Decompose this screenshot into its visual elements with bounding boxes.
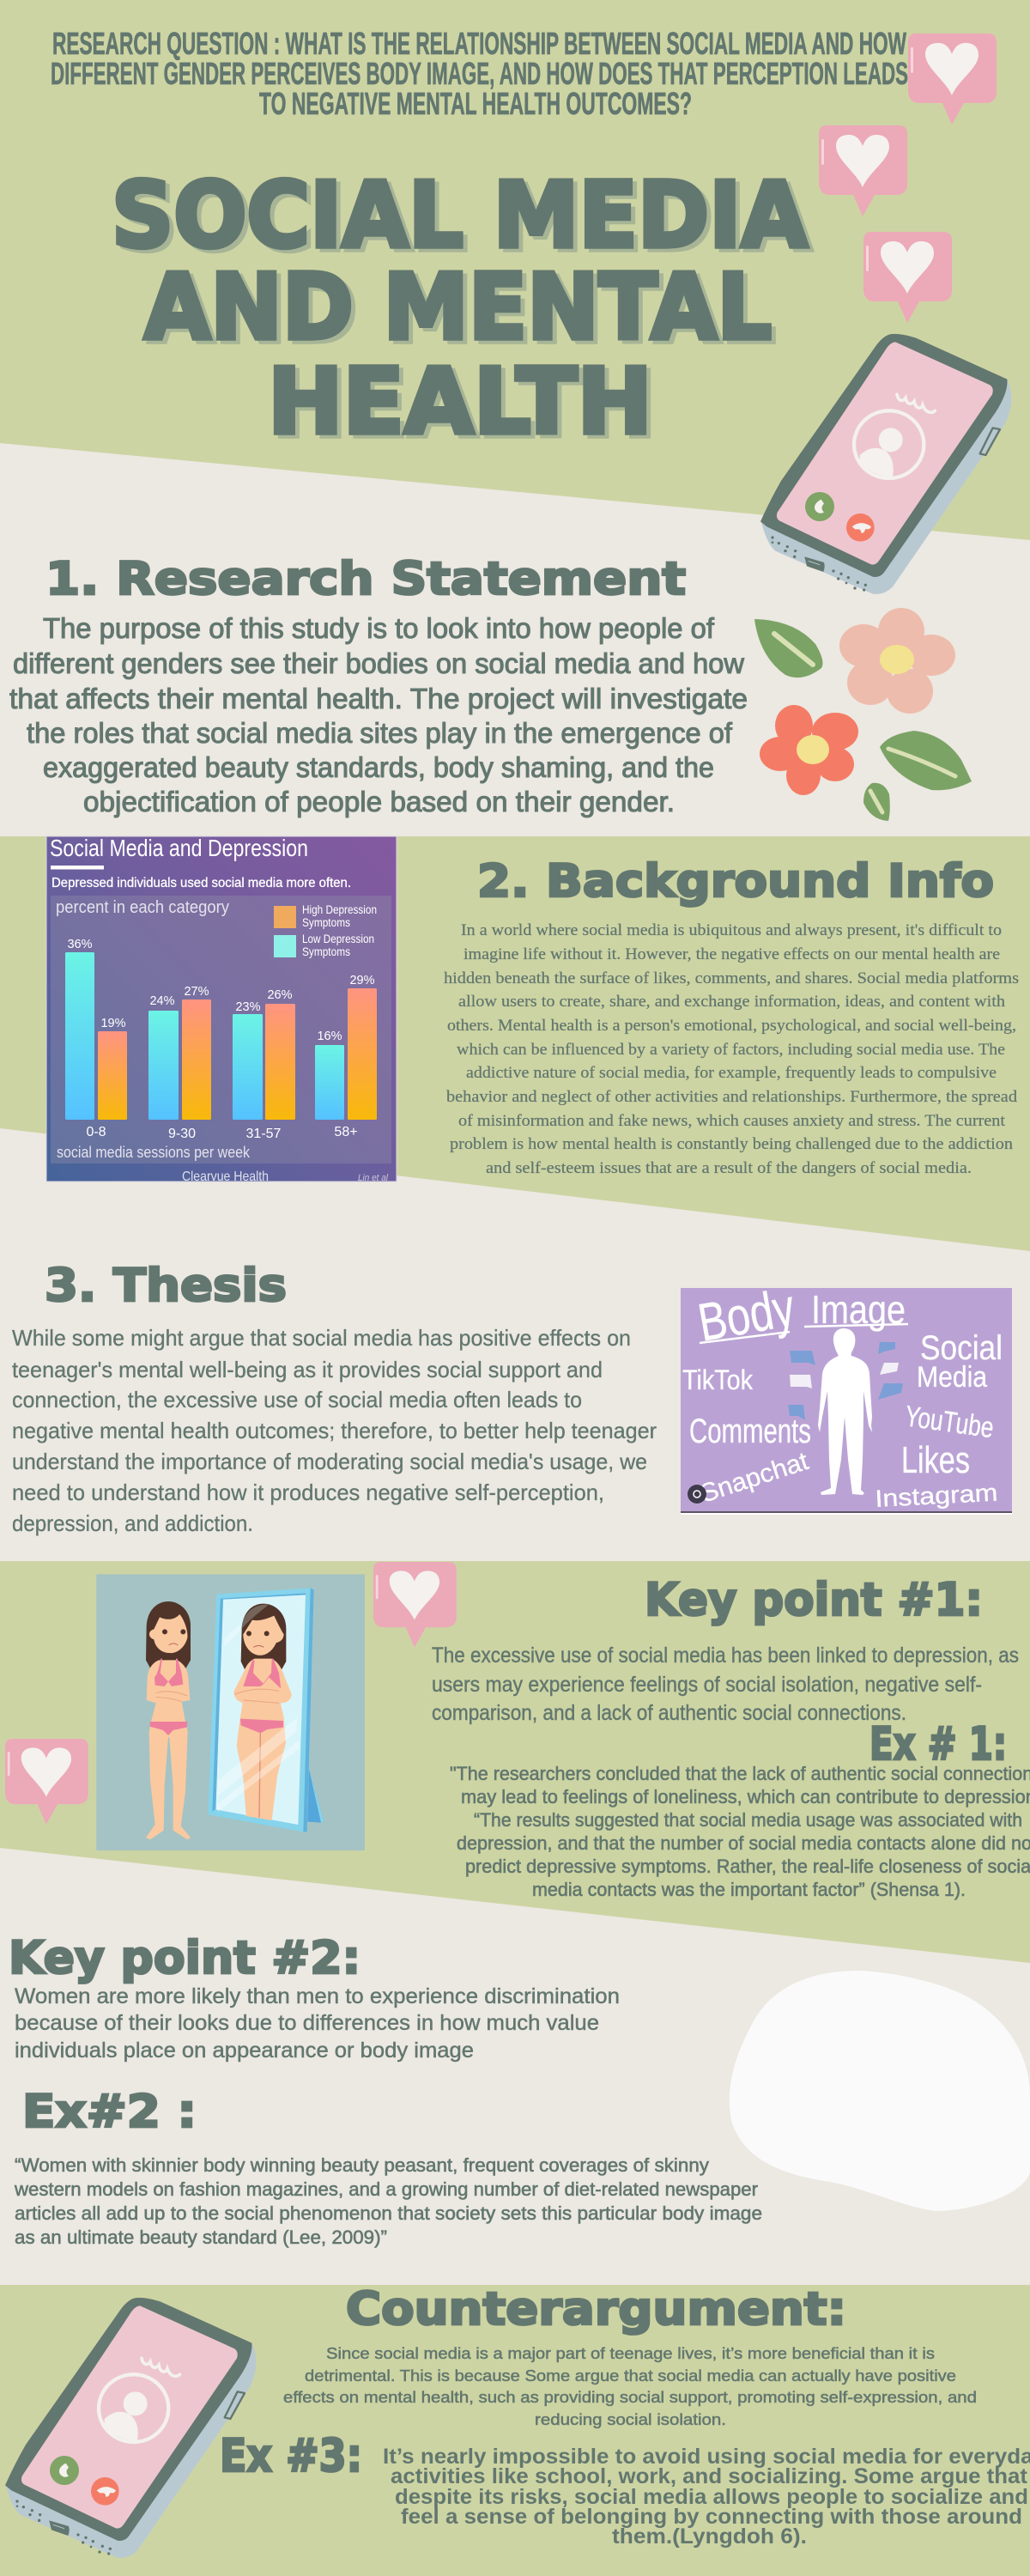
example 3 paragraph: despite its risks, social media allows people to socialize and bbox=[395, 2485, 1028, 2509]
bar values: 19% bbox=[100, 1017, 126, 1030]
labels: social platforms: Likes bbox=[901, 1439, 970, 1481]
bar values: 36% bbox=[67, 938, 93, 951]
key point 1 paragraph: comparison, and a lack of authentic social connections. bbox=[432, 1701, 906, 1725]
category labels bbox=[86, 1125, 358, 1141]
icon: large leaf bbox=[880, 731, 972, 790]
thesis paragraph: understand the importance of moderating social media's usage, we bbox=[12, 1449, 647, 1474]
heading: counterargument: Counterargument: bbox=[346, 2283, 846, 2336]
source: Clearvue Health bbox=[182, 1170, 269, 1184]
heading: key point 1: Key point #1: bbox=[645, 1574, 983, 1626]
title: HEALTH bbox=[268, 349, 652, 454]
icon: lens button bbox=[688, 1485, 706, 1504]
labels: social platforms: TikTok bbox=[682, 1364, 754, 1395]
example 1 quote: may lead to feelings of loneliness, which can contribute to depression. bbox=[461, 1786, 1030, 1807]
background info paragraph: of misinformation and fake news, which causes anxiety and stress. The current bbox=[458, 1112, 1006, 1130]
research statement paragraph: the roles that social media sites play in the emergence of bbox=[27, 717, 733, 749]
background info paragraph: In a world where social media is ubiquitous and always present, it's difficult to bbox=[461, 921, 1002, 939]
icon: phone bottom bbox=[5, 2298, 256, 2558]
key point 2 paragraph: individuals place on appearance or body image bbox=[15, 2038, 474, 2063]
key point 1 paragraph: users may experience feelings of social isolation, negative self- bbox=[432, 1673, 982, 1697]
icon: phone top bbox=[760, 334, 1011, 594]
background info paragraph: imagine life without it. However, the negative effects on our mental health are bbox=[464, 945, 1000, 963]
icon: small leaf bbox=[863, 783, 890, 821]
labels: social platforms: Instagram bbox=[875, 1479, 998, 1512]
bar values: 27% bbox=[184, 985, 209, 999]
icon: coral flower bbox=[760, 705, 858, 795]
labels: social platforms bbox=[682, 1329, 1003, 1512]
bar values: 16% bbox=[317, 1030, 342, 1043]
heading: key point 2: Key point #2: bbox=[9, 1932, 360, 1984]
example 1 quote bbox=[450, 1763, 1030, 1900]
legend bbox=[274, 903, 377, 958]
panel: mirror illustration bbox=[96, 1574, 365, 1850]
title bbox=[112, 163, 808, 454]
axis label: percent in each category bbox=[56, 898, 229, 917]
example 3 paragraph: feel a sense of belonging by connecting with those around bbox=[401, 2505, 1022, 2529]
counterargument paragraph: Since social media is a major part of teenage lives, it’s more beneficial than it is bbox=[326, 2345, 935, 2362]
labels: social platforms: Comments bbox=[689, 1413, 811, 1450]
icon: heart bubble 3 bbox=[863, 232, 952, 323]
example 3 paragraph: activities like school, work, and socializing. Some argue that bbox=[391, 2464, 1028, 2488]
example 2 quote: “Women with skinnier body winning beauty peasant, frequent coverages of skinny bbox=[15, 2154, 709, 2176]
mirror bbox=[208, 1588, 324, 1832]
heading: body image handwriting: Body bbox=[694, 1278, 799, 1353]
icon: top leaf bbox=[754, 619, 822, 677]
category labels: 0-8 bbox=[86, 1125, 106, 1139]
bar values: 29% bbox=[349, 974, 375, 987]
icon: heart bubble 1 bbox=[908, 33, 997, 125]
source: Lin et al bbox=[358, 1173, 389, 1183]
thesis paragraph bbox=[12, 1325, 657, 1536]
heading: body image handwriting: Image bbox=[811, 1287, 906, 1332]
bar values bbox=[67, 938, 375, 1043]
research statement paragraph: The purpose of this study is to look into how people of bbox=[43, 612, 715, 644]
legend: Symptoms bbox=[302, 916, 350, 929]
key point 2 paragraph: Women are more likely than men to experience discrimination bbox=[15, 1984, 620, 2008]
icons: comment bubbles bbox=[788, 1342, 903, 1420]
thesis paragraph: need to understand how it produces negative self-perception, bbox=[12, 1479, 604, 1505]
counterargument paragraph: detrimental. This is because Some argue that social media can actually have positive bbox=[305, 2367, 956, 2385]
source bbox=[182, 1170, 389, 1184]
heading: body image handwriting bbox=[694, 1278, 908, 1353]
legend: High Depression bbox=[302, 903, 377, 916]
labels: social platforms: YouTube bbox=[903, 1400, 996, 1444]
counterargument paragraph bbox=[283, 2345, 977, 2428]
icon: heart bubble left bbox=[5, 1739, 88, 1825]
example 1 quote: “The results suggested that social media usage was associated with bbox=[474, 1809, 1022, 1831]
background info paragraph bbox=[444, 921, 1019, 1177]
icon: pink flower bbox=[839, 608, 955, 714]
background info paragraph: behavior and neglect of other activities and relationships. Furthermore, the spread bbox=[446, 1088, 1018, 1106]
title: SOCIAL MEDIA bbox=[112, 163, 808, 268]
background info paragraph: and self-esteem issues that are a result of the dangers of social media. bbox=[486, 1159, 972, 1177]
category labels: 58+ bbox=[334, 1125, 358, 1139]
key point 1 paragraph bbox=[432, 1643, 1019, 1725]
counterargument paragraph: effects on mental health, such as providing social support, promoting self-expression, and bbox=[283, 2389, 977, 2406]
key point 2 paragraph: because of their looks due to differences in how much value bbox=[15, 2011, 599, 2035]
background info paragraph: problem is how mental health is constantly being challenged due to the addiction bbox=[450, 1135, 1014, 1153]
category labels: 9-30 bbox=[168, 1127, 196, 1141]
chart subtitle: Depressed individuals used social media more often. bbox=[52, 876, 351, 890]
thesis paragraph: While some might argue that social media has positive effects on bbox=[12, 1325, 631, 1351]
research question bbox=[51, 26, 908, 121]
bar values: 23% bbox=[235, 1000, 261, 1014]
thesis paragraph: depression, and addiction. bbox=[12, 1510, 253, 1536]
example 3 paragraph: them.(Lyngdoh 6). bbox=[612, 2524, 807, 2549]
heading: thesis: 3. Thesis bbox=[45, 1260, 287, 1312]
reflection bbox=[217, 1604, 300, 1820]
background info paragraph: addictive nature of social media, for example, frequently leads to compulsive bbox=[466, 1064, 997, 1082]
research statement paragraph: objectification of people based on their gender. bbox=[83, 786, 675, 817]
heading: background info: 2. Background Info bbox=[477, 855, 994, 908]
legend: Symptoms bbox=[302, 945, 350, 958]
example 2 quote: western models on fashion magazines, and a growing number of diet-related newspaper bbox=[14, 2178, 758, 2200]
x axis title: social media sessions per week bbox=[57, 1144, 251, 1161]
research question: TO NEGATIVE MENTAL HEALTH OUTCOMES? bbox=[259, 86, 692, 121]
heading: research statement: 1. Research Statement bbox=[45, 553, 686, 605]
background info paragraph: others. Mental health is a person's emotional, psychological, and social well-being, bbox=[447, 1017, 1016, 1035]
title: AND MENTAL bbox=[144, 255, 772, 360]
example 1 quote: predict depressive symptoms. Rather, the real-life closeness of social bbox=[465, 1856, 1030, 1877]
girl standing bbox=[146, 1601, 191, 1839]
labels: social platforms: Social bbox=[920, 1329, 1003, 1367]
bar values: 24% bbox=[149, 994, 175, 1008]
white blob bbox=[730, 1971, 1030, 2211]
background info paragraph: allow users to create, share, and exchange information, ideas, and content with bbox=[458, 993, 1006, 1011]
example 3 paragraph bbox=[383, 2445, 1030, 2549]
thesis paragraph: teenager's mental well-being as it provides social support and bbox=[12, 1357, 603, 1382]
bar values: 26% bbox=[267, 988, 293, 1002]
example 2 quote bbox=[14, 2154, 762, 2248]
icon: heart bubble 2 bbox=[819, 125, 907, 216]
icon: body silhouette bbox=[818, 1328, 872, 1495]
example 3 paragraph: It’s nearly impossible to avoid using social media for everyday bbox=[383, 2445, 1030, 2469]
labels: social platforms: Media bbox=[917, 1361, 987, 1394]
icon: heart bubble by mirror bbox=[373, 1562, 457, 1648]
heading: example 2: Ex#2 : bbox=[22, 2086, 197, 2138]
key point 2 paragraph bbox=[15, 1984, 620, 2063]
thesis paragraph: negative mental health outcomes; therefore, to better help teenager bbox=[12, 1418, 657, 1443]
example 1 quote: media contacts was the important factor” (Shensa 1). bbox=[532, 1879, 966, 1900]
labels: social platforms: Snapchat bbox=[697, 1447, 812, 1509]
bars bbox=[65, 952, 377, 1120]
research statement paragraph: exaggerated beauty standards, body shaming, and the bbox=[43, 751, 714, 783]
background info paragraph: which can be influenced by a variety of factors, including social media use. The bbox=[457, 1041, 1005, 1059]
chart title: Social Media and Depression bbox=[50, 835, 308, 861]
heading: example 3: Ex #3: bbox=[220, 2430, 362, 2482]
background info paragraph: hidden beneath the surface of likes, comments, and shares. Social media platforms bbox=[444, 969, 1019, 987]
category labels: 31-57 bbox=[246, 1127, 282, 1141]
illustration: flowers and leaves bbox=[754, 608, 972, 821]
panel: body image sketch bbox=[681, 1278, 1012, 1515]
research statement paragraph: different genders see their bodies on social media and how bbox=[13, 647, 744, 679]
legend: Low Depression bbox=[302, 933, 374, 945]
research statement paragraph: that affects their mental health. The project will investigate bbox=[9, 683, 748, 714]
counterargument paragraph: reducing social isolation. bbox=[535, 2411, 726, 2428]
example 2 quote: as an ultimate beauty standard (Lee, 2009)” bbox=[15, 2227, 387, 2248]
research statement paragraph bbox=[9, 612, 748, 817]
panel: bar chart social media and depression bbox=[46, 835, 397, 1184]
example 2 quote: articles all add up to the social phenomenon that society sets this particular body image bbox=[15, 2202, 762, 2224]
thesis paragraph: connection, the excessive use of social media often leads to bbox=[12, 1387, 582, 1413]
